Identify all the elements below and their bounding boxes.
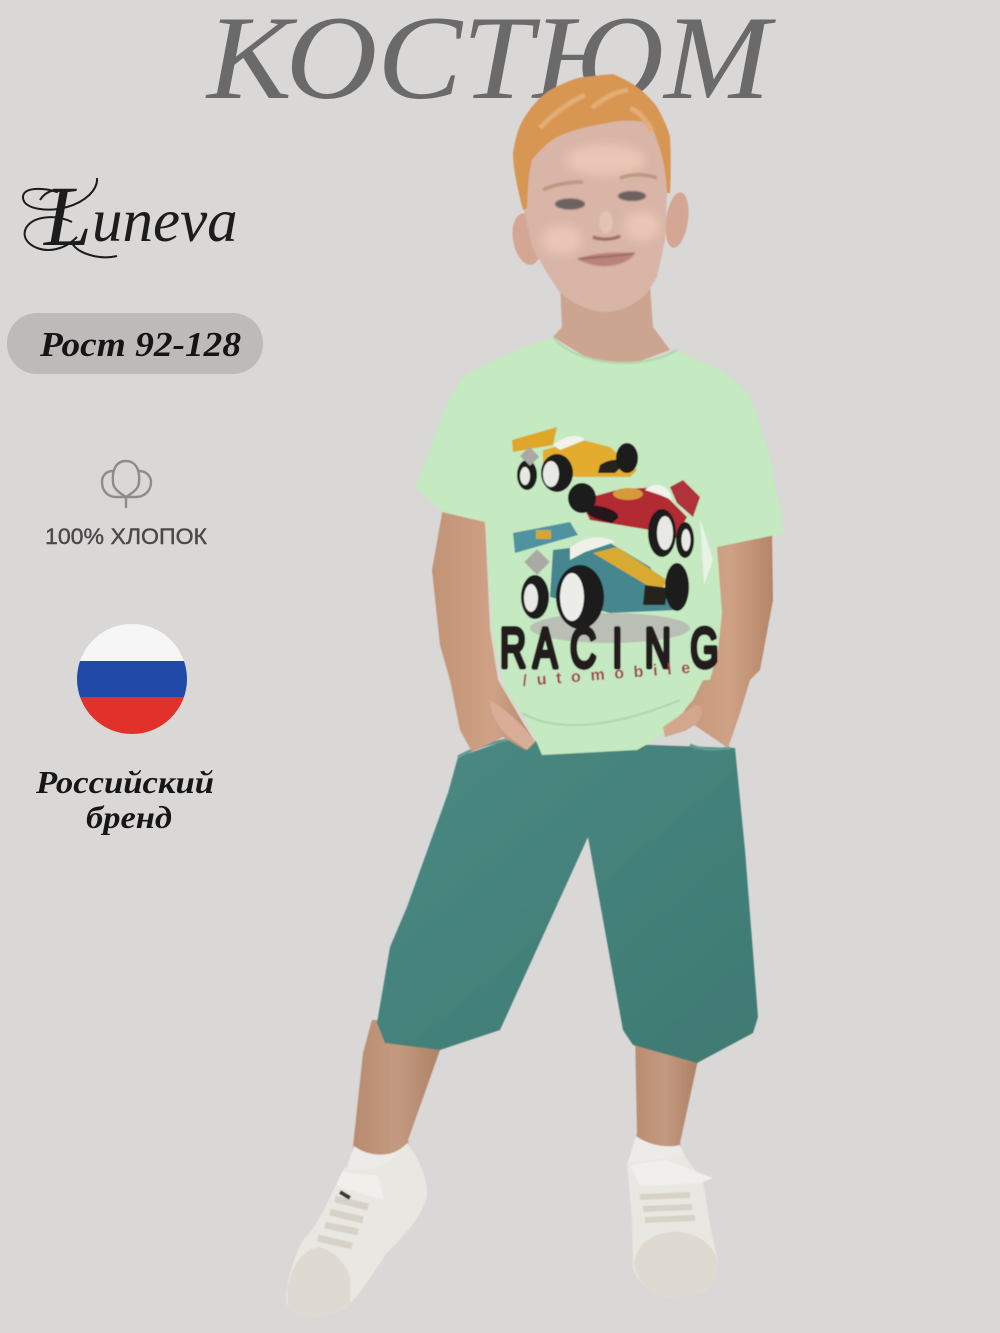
left sock bbox=[345, 1143, 416, 1178]
brand logo: L bbox=[42, 168, 92, 264]
russian brand text: Российский bbox=[35, 764, 214, 800]
hair bbox=[513, 74, 671, 210]
size pill bbox=[7, 313, 263, 374]
ears bbox=[509, 191, 692, 267]
hand left bbox=[490, 700, 535, 750]
shorts bbox=[377, 740, 758, 1063]
russian brand text bbox=[35, 764, 214, 835]
russian brand text: бренд bbox=[86, 799, 172, 835]
hand right bbox=[663, 705, 702, 737]
racing lettering: RACING bbox=[500, 617, 719, 680]
shadow bbox=[530, 613, 690, 643]
collar and folds bbox=[522, 337, 680, 725]
blue car bbox=[513, 522, 689, 629]
brand logo: uneva bbox=[92, 188, 238, 255]
car print bbox=[500, 427, 719, 690]
left arm bbox=[432, 508, 535, 752]
face bbox=[523, 100, 667, 312]
size pill: Рост 92-128 bbox=[39, 325, 241, 364]
brand logo bbox=[23, 168, 238, 264]
face shading bbox=[542, 144, 660, 255]
yellow car bbox=[512, 427, 638, 492]
cotton label: 100% ХЛОПОК bbox=[45, 524, 207, 549]
icon: russian flag bbox=[77, 624, 187, 734]
eyes and brows bbox=[543, 175, 657, 266]
boy figure bbox=[286, 74, 785, 1317]
left leg bbox=[350, 1020, 445, 1165]
icon: cotton bbox=[102, 461, 151, 508]
left shoe bbox=[286, 1143, 427, 1317]
neck bbox=[553, 285, 670, 372]
t-shirt bbox=[415, 337, 785, 755]
red car bbox=[568, 480, 700, 558]
right leg bbox=[630, 1030, 700, 1165]
white blade bbox=[700, 518, 713, 585]
right shoe bbox=[627, 1155, 718, 1298]
right sock bbox=[627, 1136, 686, 1175]
right arm bbox=[663, 532, 773, 748]
hair highlights bbox=[540, 90, 652, 132]
automobile lettering: /utomobile bbox=[522, 660, 691, 690]
